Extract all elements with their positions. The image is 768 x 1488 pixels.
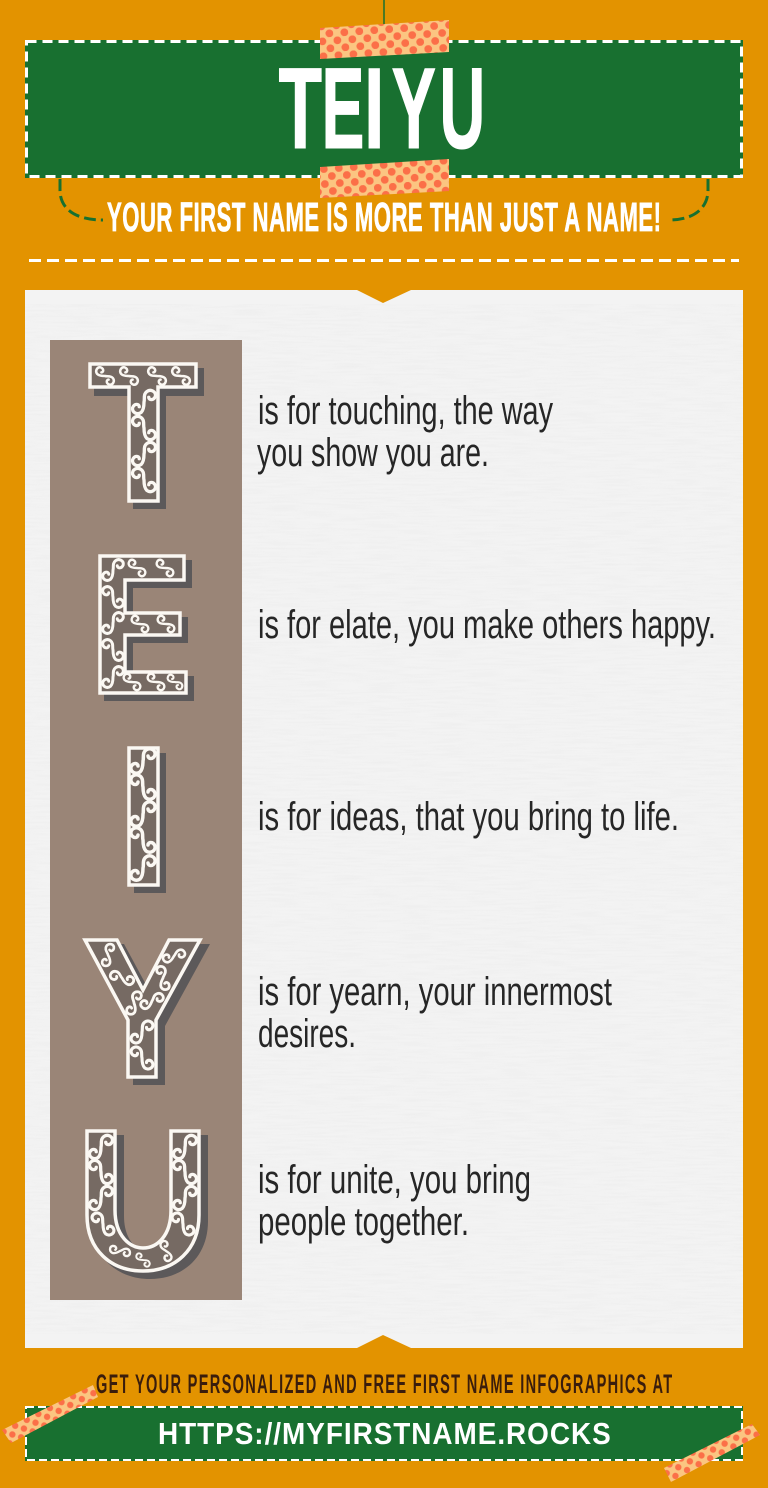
text: Y <box>258 970 612 1056</box>
text: T <box>257 389 553 475</box>
title letters: U <box>440 44 485 173</box>
title banner <box>26 42 742 176</box>
footer url: HTTPS://MYFIRSTNAME.ROCKS <box>158 1417 611 1451</box>
text: T: is for touching, the way <box>258 389 553 433</box>
letter I <box>129 748 166 893</box>
letter U <box>87 1131 208 1279</box>
text: Y: is for yearn, your innermost <box>258 970 612 1014</box>
tape: footer right <box>664 1424 760 1482</box>
text: U: is for unite, you bring <box>258 1158 531 1202</box>
letter T <box>90 364 204 509</box>
letter E <box>100 556 194 701</box>
text: T: you show you are. <box>257 431 489 475</box>
text: Y: desires. <box>258 1012 356 1056</box>
footer prompt: GET YOUR PERSONALIZED AND FREE FIRST NAME INFOGRAPHICS AT <box>96 1368 673 1399</box>
tape: bottom <box>320 159 449 198</box>
footer banner <box>26 1407 742 1460</box>
text: U: people together. <box>258 1200 469 1244</box>
subtitle: YOUR FIRST NAME IS MORE THAN JUST A NAME! <box>107 194 661 240</box>
tape: top <box>320 20 449 59</box>
title letters: T <box>278 45 322 173</box>
letter Y <box>85 940 210 1085</box>
title letters: E <box>322 44 364 173</box>
panel: paper <box>25 290 743 1348</box>
hanging string <box>383 0 385 24</box>
dashed connector: right <box>669 179 708 220</box>
dashed connector: left <box>60 179 103 220</box>
title letters: Y <box>392 44 436 172</box>
tape: footer left <box>2 1385 98 1443</box>
text: U <box>258 1158 531 1244</box>
panel: letter column <box>50 340 242 1300</box>
title letters: I <box>364 46 384 173</box>
title letters <box>278 44 485 173</box>
